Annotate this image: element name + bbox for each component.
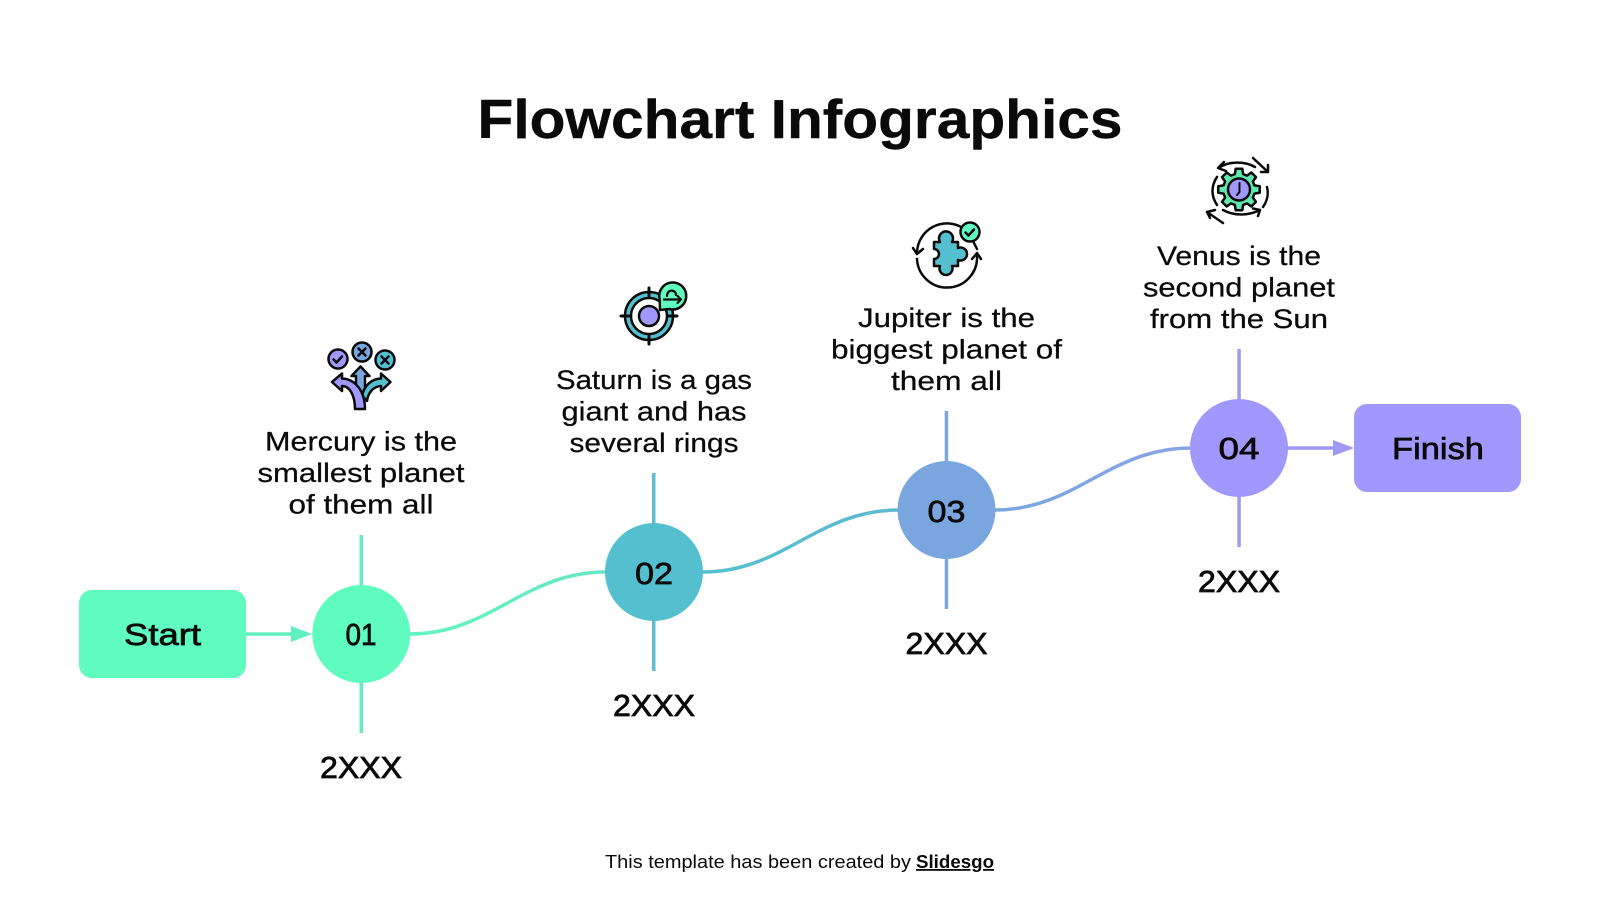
number 01: 01	[346, 617, 376, 652]
step 04	[1143, 241, 1336, 599]
text 03: them all	[891, 366, 1002, 396]
stem 03	[945, 411, 948, 609]
text 02: giant and has	[562, 396, 746, 426]
year 04: 2XXX	[1198, 564, 1280, 599]
text 01: of them all	[288, 490, 434, 520]
start node	[79, 590, 246, 678]
connector: step 03 to 04	[995, 448, 1190, 510]
year 01: 2XXX	[320, 750, 402, 785]
connector: step 02 to 03	[703, 510, 898, 572]
step 01	[258, 426, 465, 785]
text 04: Venus is the	[1157, 241, 1321, 271]
number 02: 02	[635, 556, 673, 591]
stem 02	[652, 473, 656, 671]
step 03	[831, 303, 1063, 661]
finish node	[1354, 404, 1521, 492]
node 01	[312, 585, 410, 683]
stem 04	[1237, 349, 1241, 547]
number 03: 03	[928, 494, 966, 529]
year 02: 2XXX	[613, 688, 695, 723]
icon: gear clock with arrows	[1207, 158, 1268, 223]
text 01: smallest planet	[258, 458, 465, 488]
start node: Start	[124, 617, 201, 652]
text 02: several rings	[570, 428, 738, 458]
text 04: second planet	[1143, 272, 1336, 302]
title: Flowchart Infographics	[478, 88, 1122, 150]
finish node: Finish	[1392, 431, 1484, 466]
stem 01	[360, 535, 363, 733]
arrow: step 04 to finish	[1288, 440, 1354, 456]
text 04: from the Sun	[1150, 304, 1328, 334]
step 02	[556, 365, 752, 723]
text 03: biggest planet of	[831, 334, 1063, 364]
arrow: start to step 01	[246, 626, 312, 642]
text 03: Jupiter is the	[858, 303, 1035, 333]
footer credit: This template has been created by	[605, 852, 911, 872]
text 02: Saturn is a gas	[556, 365, 752, 395]
icon: puzzle piece with cycle arrows	[913, 222, 981, 288]
node 04	[1190, 399, 1288, 497]
node 02	[605, 523, 703, 621]
footer credit: Slidesgo	[916, 852, 994, 872]
icon: diverging arrows with choices	[328, 342, 394, 409]
connector: step 01 to 02	[410, 572, 605, 634]
year 03: 2XXX	[906, 626, 988, 661]
text 01: Mercury is the	[265, 426, 457, 456]
number 04: 04	[1218, 431, 1260, 466]
node 03	[898, 461, 996, 559]
icon: target with message bubble	[621, 282, 686, 344]
